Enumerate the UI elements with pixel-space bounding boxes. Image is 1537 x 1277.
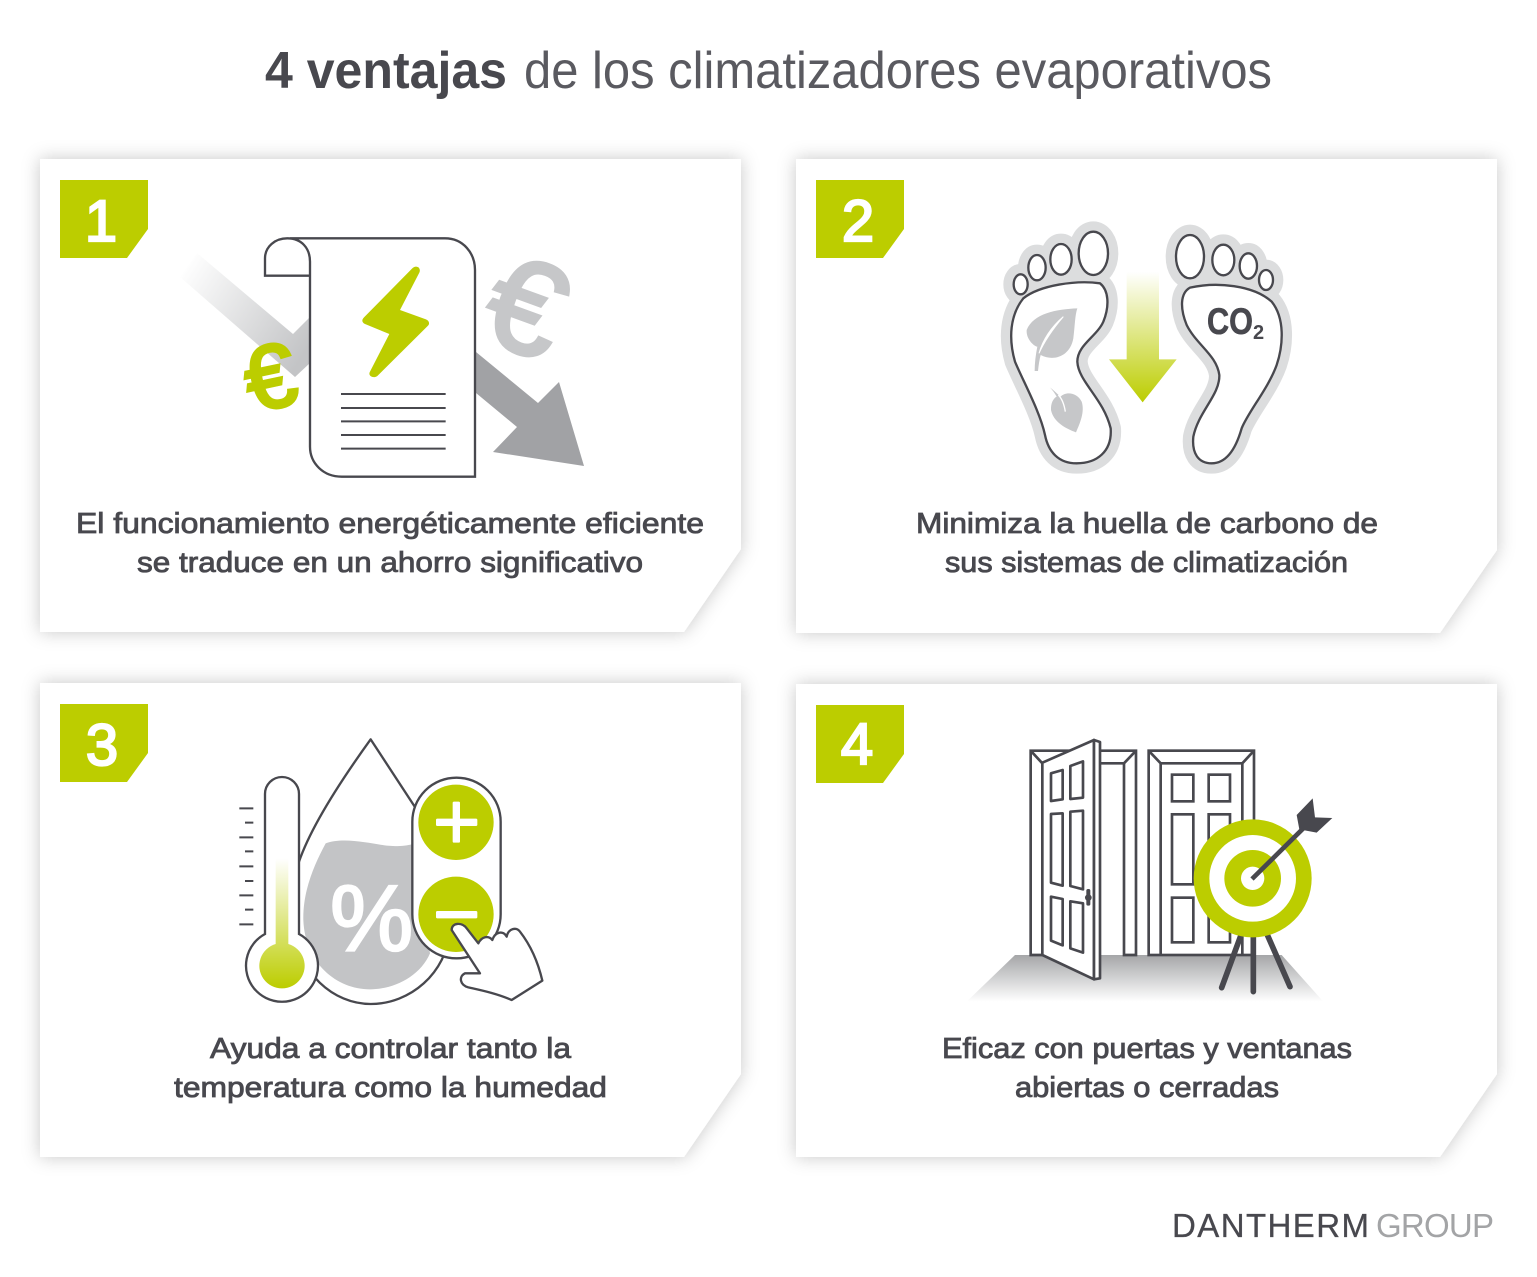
text: card 2: Minimiza la huella de carbono de <box>916 508 1378 540</box>
title: 4 ventajas <box>265 42 507 100</box>
icon: thermometer, humidity drop and controls <box>239 739 542 1004</box>
panel: card 4 open or closed doors <box>796 684 1497 1157</box>
badge 1 <box>60 180 148 258</box>
text: card 1: El funcionamiento energéticamente eficiente <box>76 508 704 540</box>
feet outlines <box>1011 232 1282 463</box>
text: card 4 <box>942 1033 1352 1104</box>
title: de los climatizadores evaporativos <box>524 42 1272 100</box>
panel: card 1 energy savings <box>40 159 741 632</box>
right door <box>1149 751 1254 955</box>
logo: Dantherm Group: GROUP <box>1376 1207 1494 1244</box>
target legs <box>1222 933 1290 992</box>
arrow down <box>1109 272 1177 402</box>
text: card 3 <box>174 1033 607 1104</box>
icon: energy bill with euros and arrow: € <box>235 324 305 432</box>
badge 4: 4 <box>841 712 873 777</box>
badge 3: 3 <box>86 713 118 778</box>
target <box>1194 819 1312 937</box>
badge 4 <box>816 705 904 783</box>
water <box>303 840 430 989</box>
icon: doors and target <box>967 740 1332 1002</box>
badge 1: 1 <box>85 189 117 254</box>
drop <box>293 739 450 1004</box>
leaf small <box>1050 387 1083 432</box>
text: card 4: Eficaz con puertas y ventanas <box>942 1033 1352 1065</box>
text: card 3: temperatura como la humedad <box>174 1072 607 1104</box>
text: card 3: Ayuda a controlar tanto la <box>210 1033 572 1065</box>
open door <box>1042 740 1100 979</box>
leaf large <box>1027 308 1077 371</box>
foot halo <box>1011 232 1282 463</box>
badge 2: 2 <box>842 189 874 254</box>
text: card 2 <box>916 508 1378 579</box>
thermometer <box>246 777 318 1002</box>
logo: Dantherm Group: DANTHERM <box>1172 1207 1369 1244</box>
label: subscript 2: 2 <box>1253 322 1264 344</box>
text: card 1 <box>76 508 704 579</box>
arrow <box>1252 828 1303 879</box>
panel: card 2 carbon footprint <box>796 159 1497 633</box>
icon: footprints and down arrow <box>1011 232 1282 463</box>
label: CO2: CO <box>1207 301 1253 342</box>
icon: energy bill with euros and arrow <box>180 225 586 477</box>
badge 2 <box>816 180 904 258</box>
control panel <box>412 778 501 958</box>
text: card 2: sus sistemas de climatización <box>945 547 1348 579</box>
panel: card 3 temperature and humidity <box>40 683 741 1157</box>
icon: thermometer, humidity drop and controls: % <box>330 867 413 971</box>
floor <box>967 955 1323 1002</box>
text: card 1: se traduce en un ahorro significativo <box>137 547 643 579</box>
badge 3 <box>60 704 148 782</box>
icon: energy bill with euros and arrow: € <box>467 225 586 388</box>
logo: Dantherm Group <box>1172 1207 1494 1244</box>
text: card 4: abiertas o cerradas <box>1015 1072 1279 1104</box>
hand <box>452 924 542 1000</box>
left door frame <box>1031 751 1136 955</box>
